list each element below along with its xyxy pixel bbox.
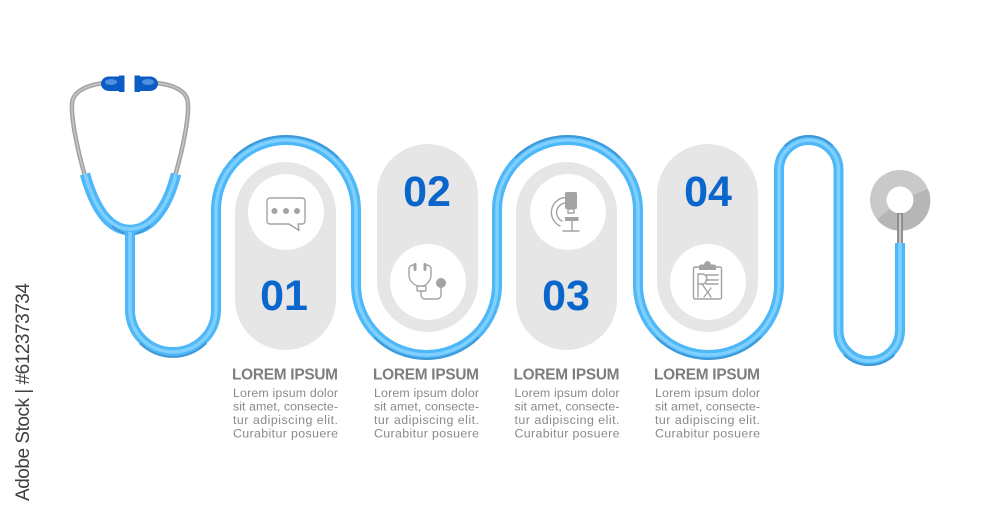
- icon: prescription clipboard: [694, 261, 722, 299]
- text block 1: [232, 366, 338, 440]
- text block 2: LOREM IPSUM: [373, 366, 479, 384]
- number 03: 03: [542, 272, 590, 320]
- icon circle 01: [248, 174, 324, 250]
- text block 1: tur adipiscing elit.: [233, 413, 338, 427]
- text block 4: LOREM IPSUM: [654, 366, 760, 384]
- panel: step 03: [516, 162, 617, 350]
- text block 3: Curabitur posuere: [514, 426, 620, 440]
- text block 1: LOREM IPSUM: [232, 366, 338, 384]
- stethoscope: [72, 76, 930, 365]
- text block 2: tur adipiscing elit.: [374, 413, 479, 427]
- icon: microscope: [551, 192, 579, 231]
- number 04: 04: [684, 168, 732, 216]
- text block 3: tur adipiscing elit.: [514, 413, 620, 427]
- text block 4: Curabitur posuere: [655, 426, 760, 440]
- pill 01: [235, 162, 336, 350]
- icon: speech bubble: [267, 198, 305, 230]
- text block 4: tur adipiscing elit.: [655, 413, 760, 427]
- earpiece right: [134, 76, 158, 92]
- text block 2: Curabitur posuere: [374, 426, 479, 440]
- text block 3: [514, 366, 620, 440]
- text block 1: Lorem ipsum dolor: [233, 386, 338, 400]
- number 01: 01: [260, 272, 308, 320]
- panel: step 02: [377, 144, 478, 332]
- ear tube gray: [72, 83, 188, 176]
- text block 3: Lorem ipsum dolor: [514, 386, 620, 400]
- text block 4: sit amet, consecte-: [655, 400, 760, 414]
- text block 2: Lorem ipsum dolor: [374, 386, 479, 400]
- text block 3: sit amet, consecte-: [514, 400, 620, 414]
- chest piece: [870, 170, 930, 244]
- number 02: 02: [403, 168, 451, 216]
- panel: step 01: [235, 162, 336, 350]
- panel: step 04: [657, 144, 758, 332]
- text block 3: LOREM IPSUM: [514, 366, 620, 384]
- text block 4: [654, 366, 760, 440]
- icon circle 02: [390, 244, 466, 320]
- earpiece left: [101, 76, 124, 92]
- text block 2: [373, 366, 479, 440]
- pill 02: [377, 144, 478, 332]
- icon circle 03: [530, 174, 606, 250]
- text block 2: sit amet, consecte-: [374, 400, 479, 414]
- text block 4: Lorem ipsum dolor: [655, 386, 760, 400]
- pill 04: [657, 144, 758, 332]
- icon circle 04: [670, 244, 746, 320]
- stock id side label: Adobe Stock | #612373734: [13, 283, 34, 501]
- pill 03: [516, 162, 617, 350]
- text block 1: Curabitur posuere: [233, 426, 338, 440]
- Y tube: [85, 174, 176, 234]
- text block 1: sit amet, consecte-: [233, 400, 338, 414]
- main winding tube: [130, 136, 900, 365]
- icon: stethoscope: [409, 263, 446, 299]
